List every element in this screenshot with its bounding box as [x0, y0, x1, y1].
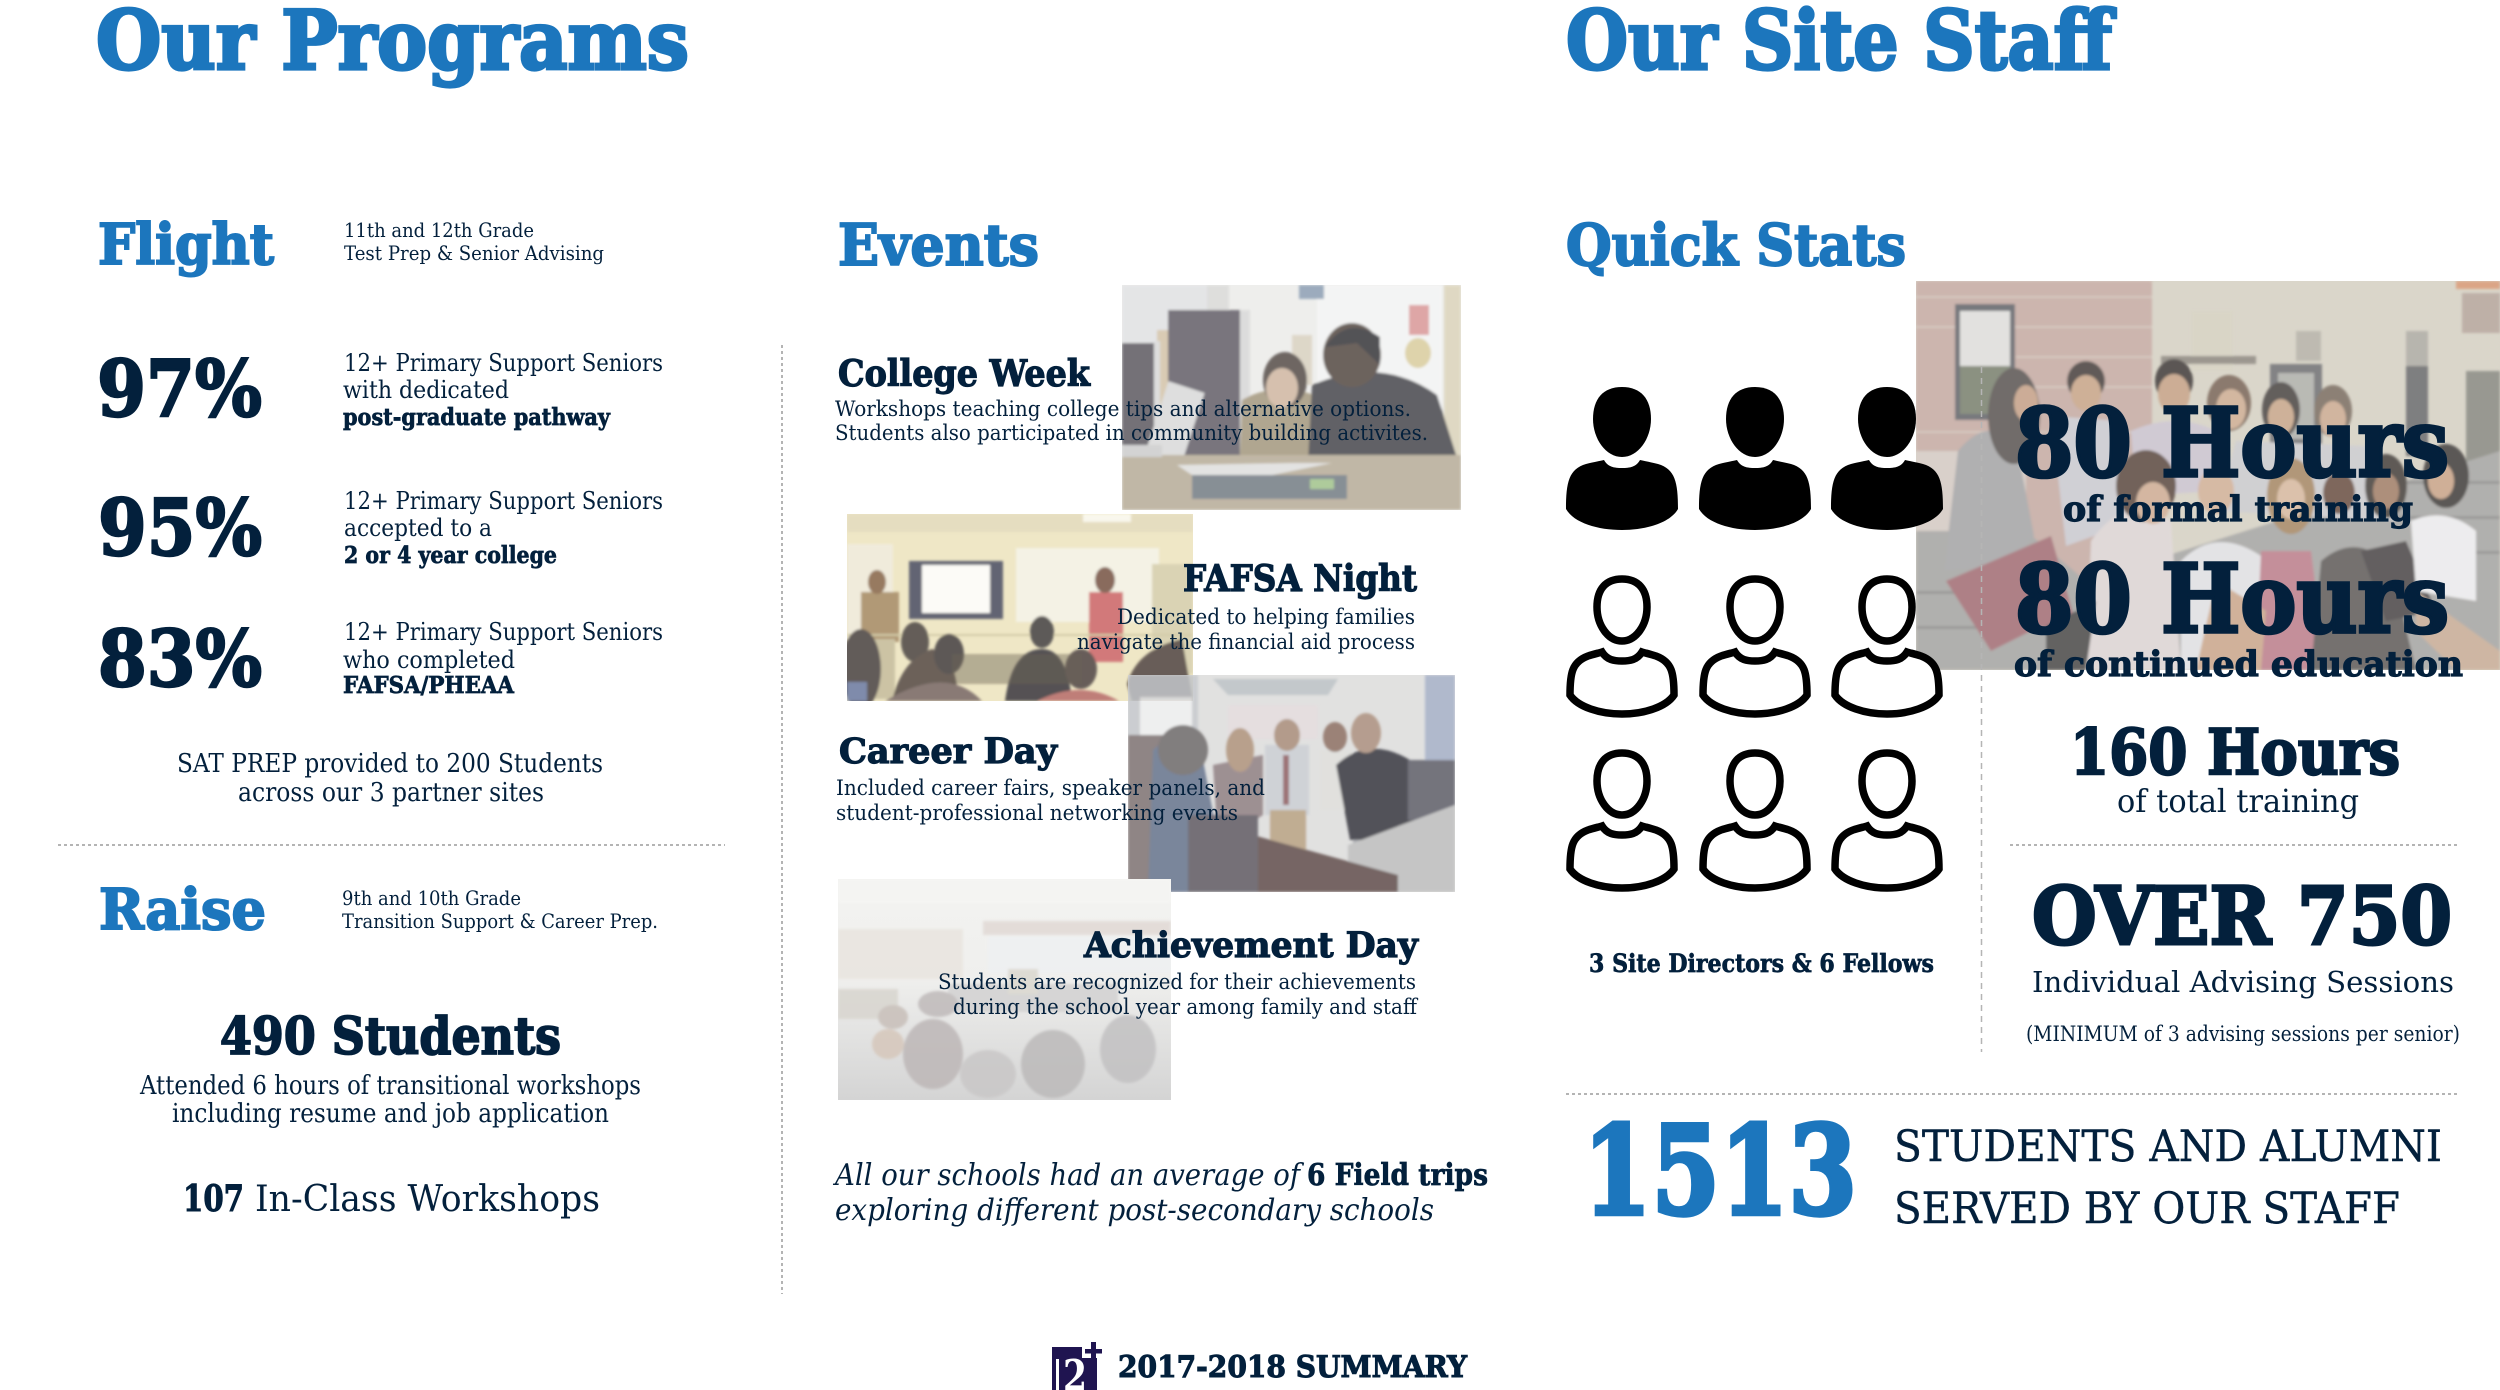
stat: 107 In-Class Workshops: 107 [183, 1178, 244, 1220]
text: 83% description [343, 618, 663, 699]
icon grid: 3 site directors and 6 fellows [1566, 387, 1943, 888]
text: students and alumni served: STUDENTS AND ALUMNI [1894, 1122, 2442, 1172]
text: College Week: College Week [838, 353, 1091, 395]
text: Raise grade description: 9th and 10th Grade [342, 886, 521, 910]
text: Career Day: Included career fairs, speaker panels, and [836, 776, 1265, 800]
icon: outlined person 5 [1703, 753, 1807, 888]
text: FAFSA Night [1077, 558, 1417, 654]
text: College Week: Students also participated in community building activites. [835, 421, 1428, 445]
icon: filled person 1 [1566, 387, 1678, 530]
text: Raise grade description [342, 886, 658, 933]
panel: our site staff [1566, 0, 2500, 1244]
photo: students at computers [1122, 285, 1461, 510]
panel: our programs [58, 0, 725, 1220]
text: College Week [835, 353, 1428, 445]
stat: over 750 advising sessions: (MINIMUM of 3 advising sessions per senior) [2026, 1022, 2460, 1046]
text: Achievement Day: Achievement Day [1083, 925, 1420, 966]
caption: staff count: 3 Site Directors & 6 Fellows [1589, 949, 1934, 978]
text: field trips: exploring different post-secondary schools [835, 1193, 1434, 1228]
icon: outlined person 1 [1570, 579, 1674, 714]
text: 97% description: with dedicated [343, 376, 509, 404]
text: 95% description: 12+ Primary Support Seniors [344, 487, 663, 515]
stat: over 750 advising sessions [2026, 869, 2460, 1046]
text: SAT prep: SAT PREP provided to 200 Students [177, 749, 603, 779]
text: Achievement Day [938, 925, 1420, 1019]
stat: 80 hours formal training: 80 Hours [2015, 388, 2449, 499]
icon: outlined person 4 [1570, 753, 1674, 888]
text: FAFSA Night: Dedicated to helping families [1117, 605, 1415, 629]
text: Flight grade description: Test Prep & Senior Advising [344, 241, 604, 265]
heading: Events: Events [838, 212, 1039, 279]
text: 2017-2018 summary: 2017-2018 SUMMARY [1118, 1350, 1468, 1385]
icon: filled person 3 [1831, 387, 1943, 530]
footer: logo and summary [1052, 1340, 1468, 1390]
stat: over 750 advising sessions: Individual Advising Sessions [2032, 965, 2454, 999]
text: Raise grade description: Transition Support & Career Prep. [342, 909, 658, 933]
logo: 12+ [1052, 1340, 1104, 1390]
text: students and alumni served: SERVED BY OUR STAFF [1894, 1184, 2400, 1234]
text: 97% description [343, 349, 663, 431]
stat: 107 In-Class Workshops: In-Class Workshops [255, 1179, 600, 1220]
heading: Flight: Flight [98, 212, 274, 278]
icon: outlined person 2 [1703, 579, 1807, 714]
stat: 95%: 95% [98, 483, 262, 574]
photo: achievement day classroom [838, 879, 1171, 1100]
icon: outlined person 3 [1835, 579, 1939, 714]
text: FAFSA Night: FAFSA Night [1183, 558, 1417, 600]
icon: outlined person 6 [1835, 753, 1939, 888]
stat: 80 hours continued education: 80 Hours [2015, 544, 2449, 655]
text: 95% description: accepted to a [344, 514, 492, 542]
text: workshops description: Attended 6 hours of transitional workshops [139, 1071, 641, 1101]
text: Career Day [836, 731, 1265, 825]
text: 97% description: 12+ Primary Support Seniors [344, 349, 663, 377]
text: SAT prep: across our 3 partner sites [238, 778, 544, 808]
text: field trips: 6 Field trips [1307, 1158, 1488, 1193]
text: workshops description: including resume and job application [172, 1099, 609, 1129]
text: field trips [832, 1158, 1488, 1228]
stat: 490 Students: 490 Students [220, 1007, 561, 1067]
text: Achievement Day: Students are recognized for their achievements [938, 970, 1416, 994]
text: College Week: Workshops teaching college tips and alternative options. [835, 397, 1411, 421]
text: field trips: All our schools had an average of [832, 1158, 1304, 1193]
photo: staff group on steps [1916, 281, 2500, 670]
text: Career Day: student-professional networking events [836, 801, 1238, 825]
icon: filled person 2 [1699, 387, 1811, 530]
heading: Quick Stats: Quick Stats [1566, 212, 1906, 279]
stat: over 750 advising sessions: OVER 750 [2032, 869, 2452, 963]
stat: 80 hours continued education: of continued education [2014, 644, 2463, 685]
text: Achievement Day: during the school year among family and staff [953, 995, 1419, 1019]
text: 95% description [344, 487, 663, 569]
text: students and alumni served [1894, 1122, 2442, 1234]
text: Flight grade description [344, 218, 604, 265]
text: Flight grade description: 11th and 12th Grade [344, 218, 534, 242]
heading: Raise: Raise [99, 877, 266, 943]
stat: 80 hours formal training: of formal training [2063, 489, 2413, 530]
stat: 160 hours total training: 160 Hours [2070, 715, 2400, 789]
text: workshops description [139, 1071, 641, 1129]
text: Career Day: Career Day [839, 731, 1059, 772]
photo: career day crowd [1128, 675, 1455, 892]
stat: 160 hours total training [2070, 715, 2400, 820]
stat: 160 hours total training: of total training [2117, 782, 2359, 820]
text: FAFSA Night: navigate the financial aid process [1077, 630, 1415, 654]
stat: 83%: 83% [98, 614, 262, 705]
text: 97% description: post-graduate pathway [343, 404, 611, 431]
photo: FAFSA night presentation [847, 514, 1193, 701]
text: 83% description: 12+ Primary Support Seniors [344, 618, 663, 646]
text: 95% description: 2 or 4 year college [344, 542, 557, 569]
stat: 1513: 1513 [1583, 1100, 1857, 1244]
text: SAT prep [177, 749, 603, 808]
panel: events [832, 212, 1488, 1228]
stat: 97%: 97% [97, 344, 262, 435]
text: 83% description: who completed [343, 646, 515, 674]
text: 83% description: FAFSA/PHEAA [343, 672, 515, 699]
